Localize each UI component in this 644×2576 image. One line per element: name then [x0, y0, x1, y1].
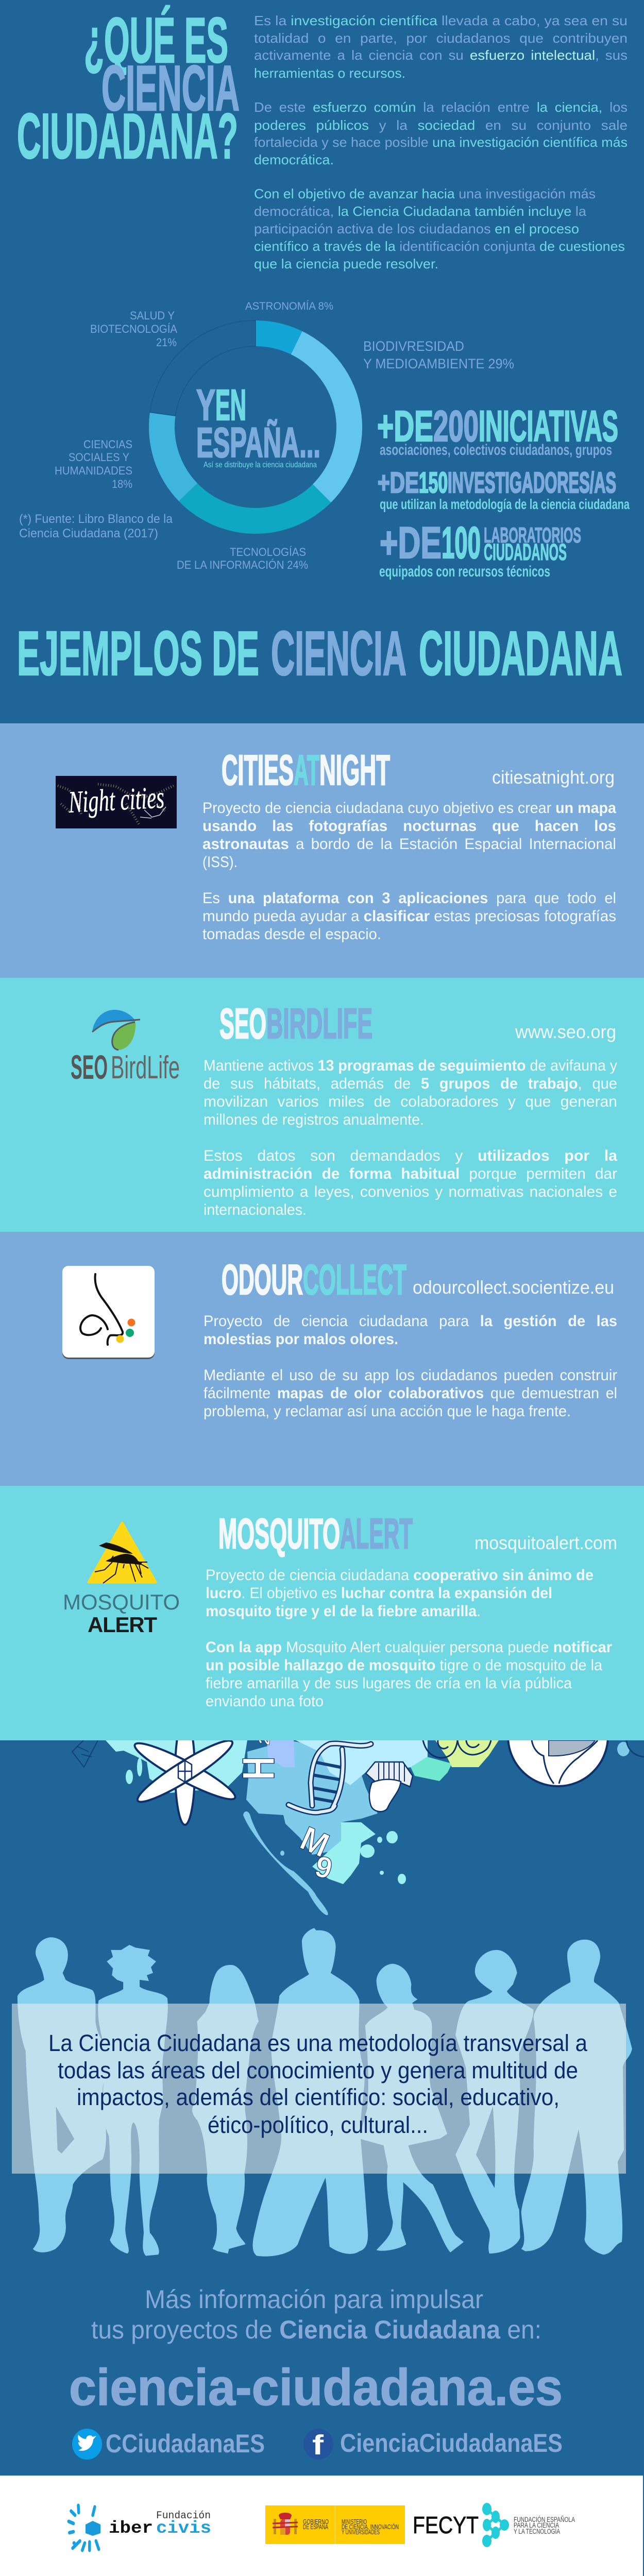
- stat: 150 investigadores: 150: [419, 466, 448, 499]
- text block: definition: Con el objetivo de avanzar hacia una investigación más: [254, 186, 596, 201]
- donut labels: CIENCIAS: [83, 438, 132, 451]
- text block: definition: democrática, la Ciencia Ciudadana también incluye la: [254, 204, 587, 219]
- segment: biodiversidad: [291, 331, 362, 502]
- stat: 150 investigadores: [378, 466, 630, 512]
- splash: periwinkle strip: [267, 1740, 295, 1767]
- icon: coat of arms: [273, 2513, 298, 2535]
- callout: transversal methodology: La Ciencia Ciudadana es una metodología transversal a: [48, 2030, 588, 2056]
- icon: subscript: 2: [256, 1735, 274, 1746]
- logo: fundación ibercivis: iber: [109, 2519, 153, 2538]
- logo: gobierno de españa: GOBIERNO: [303, 2518, 329, 2526]
- text block: definition: activamente a la ciencia con su esfuerzo intelectual , sus: [254, 47, 628, 63]
- donut labels: 21%: [156, 336, 177, 349]
- icon: fecyt molecule: [482, 2503, 509, 2547]
- stat: 200 iniciativas: [377, 402, 618, 459]
- donut centre heading: Y: [196, 381, 215, 429]
- panel: odour collect: [0, 1232, 644, 1486]
- callout: transversal methodology: impactos, además del científico: social, educativo,: [77, 2084, 560, 2110]
- project description: mundo pueda ayudar a clasificar estas preciosas fotografías: [202, 908, 616, 925]
- logo: gobierno de españa: DE ESPAÑA: [303, 2523, 328, 2531]
- figure 3: [192, 1965, 259, 2253]
- logo: fecyt: FECYT: [413, 2512, 479, 2538]
- donut labels: BIOTECNOLOGÍA: [90, 323, 177, 335]
- text block: definition: De este esfuerzo común la relación entre la ciencia, los: [254, 99, 628, 115]
- social: facebook: [303, 2429, 563, 2461]
- figure 4: [253, 1928, 368, 2257]
- icon: facebook: [303, 2429, 333, 2461]
- splash: pale cyan left: [106, 1740, 247, 1793]
- title: ¿QUÉ ES: [84, 5, 228, 76]
- source note: (*) Fuente: Libro Blanco de la: [19, 512, 173, 526]
- icon: letter outline: [72, 1740, 98, 1767]
- icon: ibercivis cube: [86, 2521, 100, 2536]
- text block: more information: [91, 2285, 541, 2344]
- stat: 100 laboratorios: +DE: [380, 518, 442, 568]
- logo: mosquito alert: MOSQUITO: [63, 1590, 180, 1614]
- stat: 100 laboratorios: equipados con recursos técnicos: [379, 563, 550, 580]
- splash: pale blue: [296, 1740, 428, 1785]
- facebook handle: CienciaCiudadanaES: [340, 2429, 563, 2458]
- logo: seo birdlife: BirdLife: [111, 1050, 180, 1086]
- icon: twitter: [72, 2429, 102, 2460]
- project description: usando las fotografías nocturnas que hacen los: [202, 818, 616, 835]
- project description: tomadas desde el espacio.: [202, 926, 381, 943]
- text block: definition: participación activa de los ciudadanos en el proceso: [254, 221, 579, 236]
- icon: dna helix: [289, 1743, 371, 1812]
- segment: tecnologías: [179, 483, 331, 534]
- icon: globe: [508, 1686, 608, 1786]
- logo: mosquito alert: ALERT: [88, 1613, 157, 1637]
- text block: definition: poderes públicos y la sociedad en su conjunto sale: [254, 117, 628, 133]
- logo: night cities: Night cities: [67, 780, 165, 819]
- section heading: ejemplos: EJEMPLOS DE: [17, 618, 259, 688]
- text block: definition: fortalecida y se hace posible una investigación científica más: [254, 134, 628, 150]
- callout: transversal methodology: ético-político, cultural...: [208, 2112, 428, 2138]
- splash: yellow-green: [435, 1740, 499, 1767]
- stat: 100 laboratorios: CIUDADANOS: [484, 539, 567, 565]
- text block: definition: Es la investigación científica llevada a cabo, ya sea en su: [254, 13, 628, 28]
- project url: mosquitoalert.com: [474, 1532, 617, 1553]
- source note: [19, 512, 173, 540]
- project description: de sus hábitats, además de 5 grupos de trabajo, que: [204, 1075, 617, 1092]
- logo: fecyt: FUNDACIÓN ESPAÑOLA: [514, 2516, 575, 2523]
- title: CIENCIA: [101, 53, 240, 124]
- donut labels: 18%: [112, 478, 132, 490]
- segment: astronomía: [256, 320, 302, 354]
- footer band: [0, 2476, 643, 2576]
- logo: gobierno de españa: Y UNIVERSIDADES: [342, 2529, 380, 2536]
- stat: 150 investigadores: +DE: [378, 466, 419, 499]
- logo: fecyt: [413, 2503, 575, 2547]
- project description: problema, y reclamar así una acción que le haga frente.: [204, 1403, 571, 1420]
- project description: Mediante el uso de su app los ciudadanos pueden construir: [204, 1367, 617, 1384]
- donut labels: ASTRONOMÍA 8%: [245, 300, 333, 312]
- donut centre heading: ESPAÑA...: [196, 419, 320, 466]
- icon: brain: [423, 1740, 491, 1758]
- title: [17, 5, 240, 172]
- project description: administración de forma habitual porque permiten dar: [204, 1165, 617, 1182]
- project description: [202, 800, 616, 943]
- text block: definition: democrática.: [254, 152, 334, 167]
- donut labels: [55, 300, 514, 571]
- segment: ciencias sociales: [149, 412, 197, 501]
- icon: arc at right edge: [626, 1740, 644, 1757]
- donut centre heading: EN: [215, 381, 246, 429]
- project description: internacionales.: [204, 1201, 307, 1218]
- project title: AT: [294, 746, 319, 794]
- section heading: ejemplos: CIENCIA: [271, 618, 406, 688]
- logo: odour collect app icon: [62, 1266, 155, 1359]
- icon: facebook: f: [312, 2430, 324, 2461]
- project description: molestias por malos olores.: [204, 1331, 398, 1348]
- project description: Mantiene activos 13 programas de seguimiento de avifauna y: [204, 1057, 617, 1074]
- icon: mouth and tongue: [366, 1762, 413, 1811]
- logo: fundación ibercivis: civis: [156, 2519, 211, 2538]
- title: CIUDADANA?: [17, 101, 238, 172]
- project title: BIRDLIFE: [266, 999, 372, 1047]
- panel: cities at night: [0, 723, 644, 978]
- project description: Proyecto de ciencia ciudadana cooperativo sin ánimo de: [206, 1567, 594, 1584]
- logo: fecyt: Y LA TECNOLOGÍA: [514, 2528, 560, 2535]
- donut centre heading: [196, 381, 320, 469]
- text block: definition: [254, 13, 628, 272]
- logo: seo birdlife: SEO: [71, 1048, 108, 1086]
- project description: movilizan varios miles de colaboradores y que generan: [204, 1093, 617, 1110]
- donut labels: BIODIVRESIDAD: [363, 338, 464, 354]
- project description: cumplimiento a leyes, convenios y normativas nacionales e: [204, 1183, 617, 1200]
- project title: [219, 999, 372, 1047]
- panel: seo birdlife: [0, 978, 644, 1232]
- text block: more information: tus proyectos de Ciencia Ciudadana en:: [91, 2315, 541, 2344]
- project description: [204, 1057, 617, 1218]
- segment: salud: [150, 320, 256, 416]
- figure 1: [18, 1937, 113, 2252]
- twitter handle: CCiudadanaES: [106, 2429, 265, 2458]
- donut labels: DE LA INFORMACIÓN 24%: [177, 558, 308, 571]
- project title: ALERT: [340, 1510, 413, 1557]
- icon: atom: [130, 1718, 240, 1825]
- project title: NIGHT: [319, 746, 390, 794]
- icon: digit 9: 9: [312, 1850, 336, 1886]
- project url: www.seo.org: [515, 1021, 616, 1042]
- project url: citiesatnight.org: [492, 767, 615, 788]
- project description: mosquito tigre y el de la fiebre amarilla.: [206, 1603, 481, 1620]
- stat: 200 iniciativas: +DE: [377, 402, 433, 450]
- logo: gobierno de españa: [265, 2505, 405, 2544]
- splash: drops: [126, 1742, 630, 1884]
- source note: Ciencia Ciudadana (2017): [19, 527, 158, 540]
- project title: CITIES: [222, 746, 294, 794]
- figure 7: [521, 1940, 632, 2255]
- figure 2: [98, 1945, 168, 2256]
- project title: ODOUR: [222, 1256, 303, 1303]
- callout: transversal methodology: [12, 2004, 626, 2174]
- project description: fiebre amarilla y de sus lugares de cría en la vía pública: [206, 1675, 572, 1692]
- text block: definition: que la ciencia puede resolver.: [254, 256, 438, 272]
- figure 6: [455, 1950, 534, 2253]
- project description: [204, 1313, 617, 1420]
- project title: COLLECT: [303, 1256, 406, 1303]
- text block: definition: herramientas o recursos.: [254, 65, 405, 81]
- splash: mint: [411, 1757, 452, 1781]
- logo: fundación ibercivis: Fundación: [156, 2510, 211, 2522]
- project description: Con la app Mosquito Alert cualquier persona puede notificar: [206, 1639, 612, 1656]
- text block: more information: Más información para impulsar: [145, 2285, 483, 2314]
- logo: fecyt: PARA LA CIENCIA: [514, 2521, 559, 2529]
- social: twitter: [72, 2429, 265, 2460]
- project title: MOSQUITO: [218, 1510, 340, 1557]
- logo: seo birdlife: [71, 1010, 180, 1086]
- text block: definition: totalidad o en parte, por ciudadanos que contribuyen: [254, 30, 628, 46]
- figure 5: [359, 1964, 464, 2252]
- stat: 200 iniciativas: 200: [433, 402, 479, 450]
- illustration: science splash: [71, 1740, 644, 1916]
- logo: night cities: [56, 776, 177, 828]
- logo: gobierno de españa: DE CIENCIA, INNOVACIÓN: [342, 2523, 399, 2531]
- icon: letter M: M: [295, 1819, 335, 1865]
- donut centre heading: Así se distribuye la ciencia ciudadana: [204, 461, 317, 469]
- donut labels: SOCIALES Y: [69, 451, 129, 464]
- donut labels: Y MEDIOAMBIENTE 29%: [363, 356, 514, 371]
- donut labels: HUMANIDADES: [55, 464, 132, 477]
- donut labels: TECNOLOGÍAS: [230, 546, 306, 558]
- donut chart: [149, 320, 362, 534]
- logo: fundación ibercivis: [69, 2505, 211, 2550]
- icon: letter H: H: [234, 1756, 284, 1780]
- project description: un posible hallazgo de mosquito tigre o de mosquito de la: [206, 1657, 602, 1674]
- project title: SEO: [219, 999, 266, 1047]
- project description: enviando una foto: [206, 1693, 324, 1710]
- project description: Es una plataforma con 3 aplicaciones para que todo el: [202, 890, 616, 907]
- project description: fácilmente mapas de olor colaborativos que demuestran el: [204, 1385, 617, 1402]
- logo: mosquito alert: [63, 1523, 180, 1637]
- project description: Proyecto de ciencia ciudadana para la gestión de las: [204, 1313, 617, 1330]
- project description: lucro. El objetivo es luchar contra la expansión del: [206, 1585, 552, 1602]
- project description: Proyecto de ciencia ciudadana cuyo objetivo es crear un mapa: [202, 800, 616, 817]
- stat: 100 laboratorios: [379, 518, 581, 580]
- silhouettes: group of people: [18, 1928, 632, 2257]
- stat: 100 laboratorios: 100: [442, 518, 481, 568]
- project description: (ISS).: [202, 854, 238, 871]
- splash: lower cyan: [312, 1822, 376, 1884]
- splash: mid blue: [246, 1740, 378, 1855]
- panel: mosquito alert: [0, 1486, 644, 1740]
- icon: ibercivis rays: [69, 2505, 99, 2550]
- project description: [206, 1567, 612, 1710]
- text block: definition: científico a través de la identificación conjunta de cuestiones: [254, 239, 625, 254]
- splash: streak: [243, 1811, 328, 1915]
- project description: astronautas a bordo de la Estación Espacial Internacional: [202, 836, 616, 853]
- project description: millones de registros anualmente.: [204, 1111, 424, 1128]
- website url: ciencia-ciudadana.es: [69, 2359, 563, 2416]
- project description: Estos datos son demandados y utilizados por la: [204, 1147, 617, 1164]
- project url: odourcollect.socientize.eu: [413, 1277, 614, 1298]
- donut labels: SALUD Y: [130, 309, 175, 322]
- logo: gobierno de españa: MINISTERIO: [342, 2518, 367, 2526]
- callout: transversal methodology: todas las áreas del conocimiento y genera multitud de: [58, 2057, 578, 2083]
